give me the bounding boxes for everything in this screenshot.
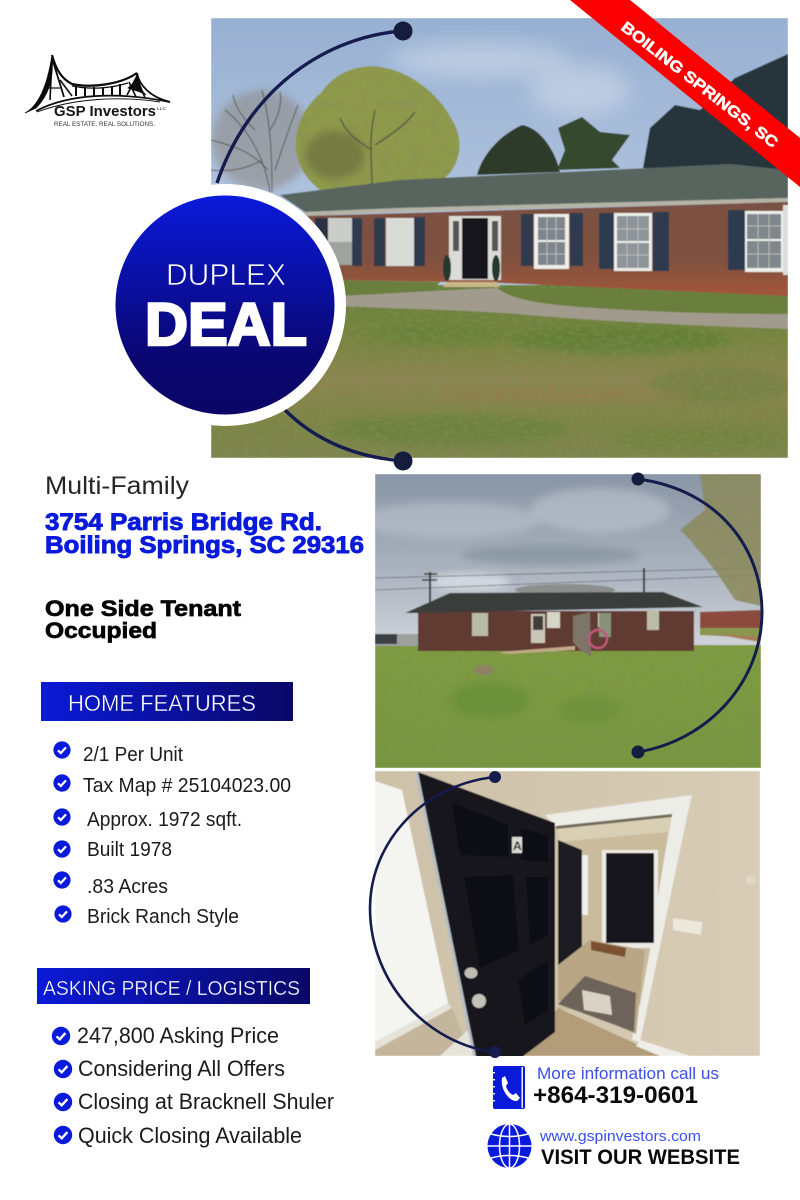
feature: year built: Built 1978 [87, 839, 172, 861]
photo: interior entry with black doors: A [513, 839, 522, 853]
far door frame [602, 850, 658, 948]
heading: asking price [37, 968, 310, 1004]
tile floor [558, 940, 645, 1034]
arc dot: rear photo bottom [632, 746, 644, 758]
door panels [452, 802, 548, 1025]
right dark trees [643, 54, 788, 172]
heading: asking price: ASKING PRICE / LOGISTICS [43, 978, 300, 1000]
logo: GSP Investors [25, 55, 170, 128]
brick wall [418, 611, 694, 651]
tree right [680, 474, 761, 606]
arc dot: interior photo top [489, 771, 501, 783]
lawn [375, 645, 761, 768]
arc: rear photo [638, 479, 762, 752]
arc dot: bottom [394, 452, 412, 470]
green tree [296, 64, 462, 190]
text: occupancy: Occupied [45, 618, 157, 643]
logo LLC mark: LLC [157, 106, 167, 111]
carpet [522, 1008, 660, 1056]
feature: units [53, 741, 183, 766]
thermostat [746, 875, 756, 885]
logistics: closing attorney: Closing at Bracknell Shuler [78, 1089, 334, 1114]
roof [405, 592, 703, 613]
list: home features [53, 741, 291, 928]
feature: style: Brick Ranch Style [87, 906, 239, 928]
icon: globe [488, 1124, 532, 1168]
heading: home features: HOME FEATURES [68, 690, 256, 716]
windows [472, 613, 488, 636]
brick wall [305, 202, 788, 296]
arc: interior photo [370, 777, 495, 1052]
pink hoop [589, 630, 607, 648]
photo: front of brick ranch duplex [211, 18, 790, 458]
list: asking price and logistics [52, 1023, 334, 1148]
logistics: quick closing: Quick Closing Available [78, 1123, 302, 1148]
flower bed grass [510, 289, 788, 313]
brown door mat [591, 941, 626, 957]
logo wordmark: GSP Investors [54, 103, 156, 120]
left windows [314, 218, 328, 242]
feature: acreage [53, 871, 168, 898]
ribbon: location [570, 0, 800, 187]
arc dot: interior photo bottom [489, 1046, 501, 1058]
text: occupancy [45, 596, 242, 643]
door knobs [464, 968, 478, 978]
wooden divider [573, 612, 591, 656]
photo: interior entry with black doors [375, 771, 760, 1057]
right windows and shutters [521, 214, 533, 266]
logo tagline: REAL ESTATE. REAL SOLUTIONS. [54, 122, 155, 128]
window with blinds [375, 781, 448, 1042]
entry topiaries [443, 255, 451, 281]
text: address: 3754 Parris Bridge Rd. [45, 509, 322, 536]
logistics: offers: Considering All Offers [78, 1056, 285, 1081]
feature: acreage: .83 Acres [87, 876, 168, 898]
far door [606, 853, 654, 943]
heading: home features [41, 682, 293, 721]
lawn shadow [450, 682, 530, 718]
website call to action: VISIT OUR WEBSITE [541, 1146, 740, 1169]
phone number: +864-319-0601 [533, 1082, 698, 1109]
roof [280, 164, 788, 212]
side hallway door [558, 840, 582, 968]
text: address [45, 509, 364, 559]
photo: rear of duplex [360, 474, 761, 768]
logistics: price: 247,800 Asking Price [77, 1023, 279, 1048]
entry door [449, 216, 501, 280]
background tree line [514, 584, 616, 594]
stump patch [474, 665, 494, 675]
switch plate [673, 918, 702, 935]
website url: www.gspinvestors.com [539, 1128, 701, 1145]
icon: phone book [492, 1066, 525, 1109]
contact: website [488, 1124, 740, 1169]
door frame [545, 795, 692, 1042]
concrete path [340, 288, 788, 329]
text: property type: Multi-Family [45, 472, 190, 500]
pine tree [557, 117, 630, 170]
arc dot: top [394, 22, 412, 40]
arc: top photo upper [217, 31, 403, 183]
contact prompt: More information call us [537, 1064, 719, 1083]
grey mat with papers [558, 976, 636, 1032]
far road [375, 634, 420, 646]
badge: duplex deal [104, 184, 346, 426]
utility poles [375, 568, 760, 602]
patio slab [500, 646, 575, 654]
text: occupancy: One Side Tenant [45, 596, 242, 621]
feature: tax map: Tax Map # 25104023.00 [83, 775, 291, 797]
dark oak tree [477, 125, 560, 175]
feature: square footage: Approx. 1972 sqft. [87, 809, 242, 831]
black door [418, 772, 555, 1057]
badge headline: DEAL [145, 291, 307, 358]
bare tree [211, 90, 312, 192]
window sill and wall below [375, 1003, 452, 1050]
arc dot: rear photo top [632, 472, 644, 486]
feature: year built [53, 839, 172, 861]
text: address: Boiling Springs, SC 29316 [45, 532, 364, 559]
icon: bridge [25, 55, 170, 113]
baseboard [636, 1040, 690, 1056]
hallway ceiling [558, 817, 672, 842]
arc: top photo lower [285, 410, 403, 461]
badge label: DUPLEX [166, 257, 286, 292]
letter A plate [512, 837, 522, 853]
hallway wall [558, 832, 668, 1010]
feature: units: 2/1 Per Unit [83, 744, 183, 766]
ribbon text: BOILING SPRINGS, SC [618, 19, 781, 152]
lawn [211, 285, 788, 458]
contact: phone [492, 1064, 719, 1109]
brick fence [700, 610, 761, 628]
